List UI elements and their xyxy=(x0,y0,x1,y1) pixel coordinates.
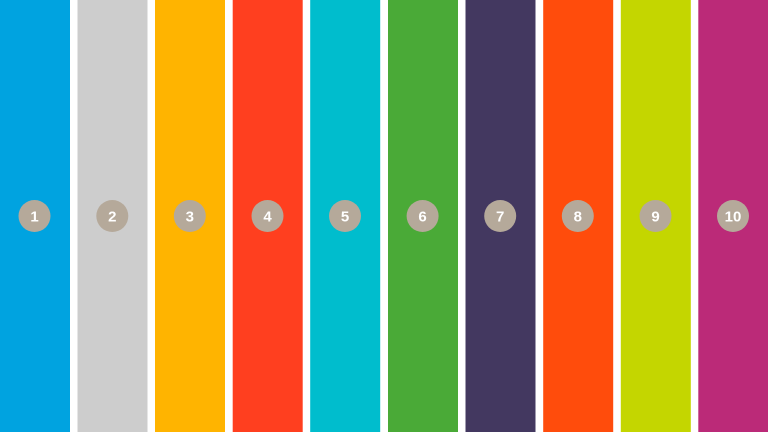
bar 7: dark purple xyxy=(466,0,536,432)
bar 2: grey: 2 xyxy=(108,208,116,226)
bar 2: grey xyxy=(78,0,148,432)
bar 9: lime xyxy=(621,0,691,432)
bar 5: teal: 5 xyxy=(341,208,349,226)
bar 3: amber: 3 xyxy=(186,208,194,226)
bar 6: green xyxy=(388,0,458,432)
bar 3: amber xyxy=(155,0,225,432)
bar 10: magenta: 10 xyxy=(725,208,741,226)
bar 9: lime: 9 xyxy=(651,208,660,226)
bar 4: red: 4 xyxy=(263,208,272,226)
bar 8: orange xyxy=(543,0,613,432)
bar 7: dark purple: 7 xyxy=(496,208,504,226)
bar 8: orange: 8 xyxy=(574,208,582,226)
bar 10: magenta xyxy=(698,0,768,432)
bar 1: blue: 1 xyxy=(30,208,39,226)
bar 5: teal xyxy=(310,0,380,432)
bar 1: blue xyxy=(0,0,70,432)
bar 4: red xyxy=(233,0,303,432)
bar 6: green: 6 xyxy=(418,208,427,226)
